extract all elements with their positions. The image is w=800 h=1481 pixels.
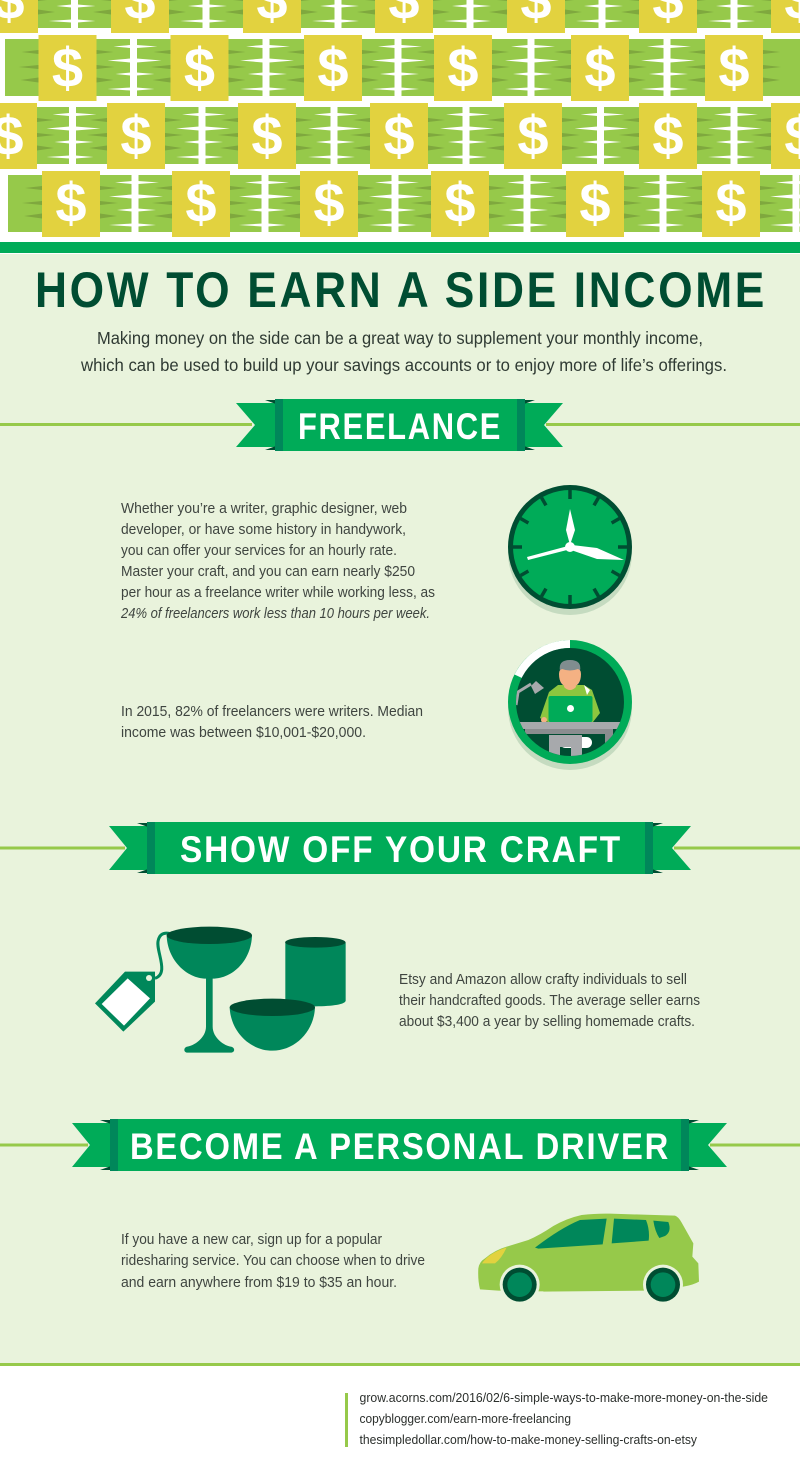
banner: rows of dollar bills: $ — [517, 104, 549, 167]
sources — [345, 1391, 768, 1447]
ribbon: show off your craft — [0, 822, 800, 874]
text: freelance paragraph: developer, or have some history in handywork, — [121, 522, 406, 538]
banner: rows of dollar bills: $ — [185, 171, 217, 234]
text: freelance statistics: income was between $10,001-$20,000. — [121, 725, 366, 741]
row 3 — [0, 103, 37, 169]
text: freelance paragraph: per hour as a freelance writer while working less, as — [121, 585, 435, 601]
text: driver paragraph: ridesharing service. You can choose when to drive — [121, 1253, 425, 1269]
icon: freelancer at desk — [508, 640, 632, 770]
banner: rows of dollar bills: $ — [718, 36, 750, 99]
page background — [0, 254, 800, 1364]
text: freelance paragraph: Whether you’re a writer, graphic designer, web — [121, 501, 407, 517]
text: freelance paragraph: you can offer your services for an hourly rate. — [121, 543, 397, 559]
intro text: Making money on the side can be a great way to supplement your monthly income, — [97, 328, 703, 348]
icon: crafts with price tag — [95, 927, 346, 1053]
ribbon: freelance: FREELANCE — [298, 406, 502, 447]
row 2 — [38, 35, 96, 101]
person — [540, 685, 600, 722]
banner: rows of dollar bills: $ — [55, 171, 87, 234]
text: freelance paragraph: Master your craft, and you can earn nearly $250 — [121, 564, 415, 580]
banner: rows of dollar bills: $ — [184, 36, 215, 99]
sources: grow.acorns.com/2016/02/6-simple-ways-to-make-more-money-on-the-side — [360, 1391, 768, 1405]
text: freelance paragraph: 24% of freelancers work less than 10 hours per week. — [120, 606, 430, 622]
icon: clock — [508, 485, 632, 615]
text: driver paragraph: If you have a new car, sign up for a popular — [121, 1232, 382, 1248]
intro text — [80, 328, 727, 375]
footer rule — [0, 1363, 800, 1366]
green header rule — [0, 242, 800, 253]
banner: rows of dollar bills: $ — [652, 104, 684, 167]
text: freelance statistics — [121, 704, 423, 741]
banner: rows of dollar bills: $ — [447, 36, 479, 99]
text: craft paragraph: their handcrafted goods. The average seller earns — [399, 993, 700, 1009]
ribbon: become a personal driver — [0, 1119, 800, 1171]
text: craft paragraph: about $3,400 a year by selling homemade crafts. — [399, 1014, 695, 1030]
text: driver paragraph: and earn anywhere from $19 to $35 an hour. — [121, 1275, 397, 1291]
sources: copyblogger.com/earn-more-freelancing — [360, 1412, 571, 1426]
banner: rows of dollar bills: $ — [444, 171, 476, 234]
text: freelance statistics: In 2015, 82% of freelancers were writers. Median — [121, 704, 423, 720]
goblet — [167, 935, 252, 1053]
row 4 — [42, 171, 100, 237]
laptop — [548, 696, 592, 722]
text: driver paragraph — [121, 1232, 425, 1291]
banner: rows of dollar bills — [0, 0, 800, 237]
banner: rows of dollar bills: $ — [317, 36, 349, 99]
intro text: which can be used to build up your savings accounts or to enjoy more of life’s offerings. — [80, 355, 727, 375]
lamp — [516, 684, 531, 705]
text: freelance paragraph — [120, 501, 435, 622]
text: craft paragraph: Etsy and Amazon allow crafty individuals to sell — [399, 972, 687, 988]
banner: rows of dollar bills: $ — [715, 171, 747, 234]
banner: rows of dollar bills: $ — [584, 36, 616, 99]
price tag — [155, 933, 169, 978]
text: craft paragraph — [399, 972, 700, 1030]
row 1 — [0, 0, 38, 33]
banner: rows of dollar bills: $ — [383, 104, 415, 167]
ribbon: freelance — [0, 399, 800, 451]
ribbon: become a personal driver: BECOME A PERSONAL DRIVER — [130, 1126, 670, 1167]
desk — [520, 722, 620, 729]
chair and legs — [560, 737, 592, 748]
bowl — [230, 1007, 315, 1051]
ribbon: show off your craft: SHOW OFF YOUR CRAFT — [180, 829, 622, 870]
banner: rows of dollar bills: $ — [120, 104, 152, 167]
banner: rows of dollar bills: $ — [52, 36, 83, 99]
icon: car — [478, 1214, 699, 1308]
banner: rows of dollar bills: $ — [251, 104, 283, 167]
cylinder — [285, 942, 346, 1006]
sources: thesimpledollar.com/how-to-make-money-selling-crafts-on-etsy — [360, 1433, 698, 1447]
banner: rows of dollar bills: $ — [313, 171, 345, 234]
banner: rows of dollar bills: $ — [579, 171, 611, 234]
